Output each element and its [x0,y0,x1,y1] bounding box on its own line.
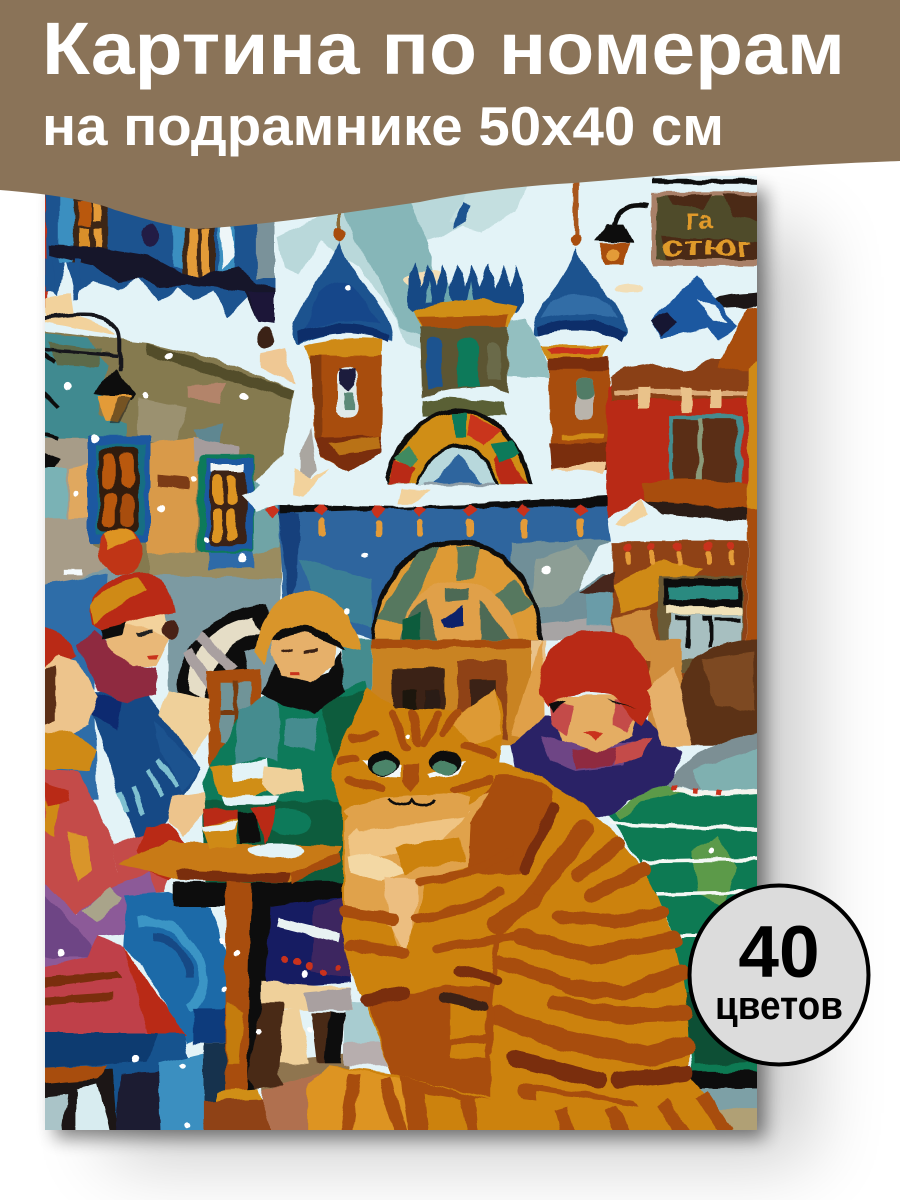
title: Картина по номерам [42,7,845,90]
painting: winter town with ginger cat [27,166,773,1149]
snowflakes [56,284,715,1127]
cat head stripes [341,712,493,791]
top-left blue building [45,194,276,348]
cat head [331,687,503,821]
ginger cat [307,687,738,1144]
red building right [608,358,748,521]
right edge brown wall [715,292,757,640]
left figure in red sweater [42,626,205,967]
sign: га [686,204,713,235]
church left tower [292,191,392,472]
cat body stripes [345,808,685,1107]
church central tower [408,261,523,416]
snow ledge [608,499,748,544]
door arch [372,539,545,746]
figure's lap and legs, navy and blue [42,1033,203,1134]
header banner [0,0,900,229]
snowy blue roof [652,275,738,340]
hanging lamp right [594,205,649,265]
left window [88,435,150,543]
wall ornaments [265,504,587,517]
left-edge dark railing [42,353,59,438]
badge: 40 colours: цветов [715,984,843,1028]
subtitle: на подрамнике 50х40 см [42,95,724,157]
badge: 40 colours: 40 [738,912,820,993]
person's dress and boots [173,882,352,1093]
left stone building [37,330,294,650]
cat body [307,761,738,1144]
sign: стюг [662,230,753,261]
orange building lower right [612,541,748,700]
girl in yellow hat and green coat [203,589,370,887]
child in red hat right [511,630,682,816]
cat eyes [362,751,467,779]
snow ledge tan accent [45,293,116,335]
clouds [277,176,643,378]
ground and snow under table [203,1003,392,1134]
cat paw and tail [307,1065,420,1144]
right window [198,455,255,552]
person from behind, hair and grey coat [647,640,763,796]
child in red hat, blue sweater [77,528,210,852]
church decorative arch [384,408,533,493]
table with glasses [120,806,342,1134]
sign [652,179,763,266]
sky and snow [27,166,773,1149]
church right tower [534,166,627,479]
shoulder dark patch [469,775,553,876]
canvas drop shadow [55,190,810,1160]
badge: 40 colours [690,886,868,1064]
lattice chair back [176,605,275,771]
green striped sweater [610,785,763,1139]
church snow roof [241,428,614,511]
street lamp left [42,315,136,423]
church blue wall [277,499,614,640]
blue pants [123,892,229,1043]
red skirt [42,937,185,1038]
cat nose and mouth [402,764,418,791]
blue hanging fragment [452,201,471,230]
snow wedge and dark roof right of door [578,539,612,589]
mid-ground behind people [52,638,683,800]
cat lower front dark [365,985,491,1099]
grey-blue wall right of door [511,539,612,640]
cat chest [345,791,491,952]
